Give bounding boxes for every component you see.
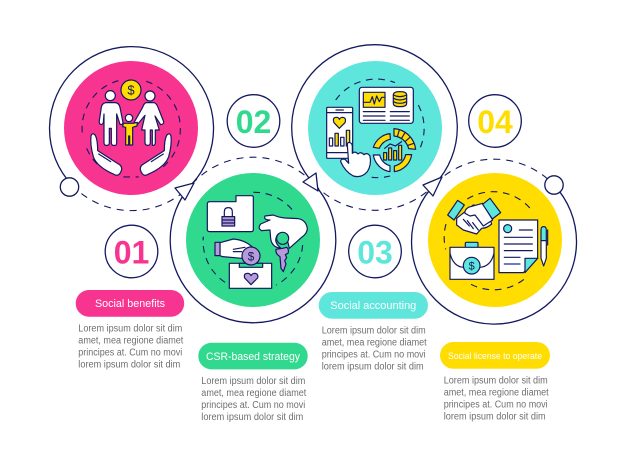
label pill: social accounting: Social accounting	[330, 300, 416, 312]
number 01 badge	[105, 225, 158, 278]
text: social accounting description	[322, 326, 427, 372]
icon: folder, key and donation: $	[248, 250, 255, 263]
label pill: CSR-based strategy: CSR-based strategy	[206, 351, 300, 363]
label pill: social benefits: Social benefits	[95, 298, 165, 310]
text: CSR-based strategy description: principes at. Cum no movi	[201, 400, 305, 411]
label pill: CSR-based strategy	[198, 343, 308, 369]
text: social benefits description	[78, 324, 184, 371]
number 02 badge: 02	[236, 104, 271, 140]
text: social benefits description: amet, mea regione diamet	[78, 336, 184, 347]
panel: CSR-based strategy icon circle	[186, 173, 320, 307]
text: social license description: principes at. Cum no movi	[444, 400, 548, 410]
text: social benefits description: lorem ipsum dolor sit dim	[78, 360, 180, 371]
panel: social accounting icon circle	[308, 61, 442, 195]
text: social benefits description: Lorem ipsum dolor sit dim	[78, 324, 182, 335]
text: CSR-based strategy description: Lorem ipsum dolor sit dim	[201, 376, 305, 387]
label pill: social license to operate	[440, 342, 550, 369]
label pill: social benefits	[76, 290, 184, 317]
icon: phone, report and charts	[327, 79, 424, 178]
text: social accounting description: lorem ipsum dolor sit dim	[322, 362, 424, 372]
number 01 badge: 01	[114, 234, 149, 270]
number 04 badge: 04	[477, 104, 513, 140]
text: CSR-based strategy description: lorem ipsum dolor sit dim	[201, 412, 303, 423]
text: CSR-based strategy description: amet, mea regione diamet	[201, 388, 307, 399]
number 03 badge: 03	[357, 234, 393, 270]
text: CSR-based strategy description	[201, 376, 307, 423]
panel: social license icon circle	[428, 173, 562, 307]
number 02 badge	[227, 95, 280, 147]
number 03 badge	[349, 225, 401, 278]
number 04 badge	[469, 95, 521, 147]
text: social benefits description: principes at. Cum no movi	[78, 348, 182, 359]
icon: handshake, briefcase and contract: $	[469, 261, 475, 273]
text: social license description	[444, 376, 549, 422]
text: social license description: Lorem ipsum dolor sit dim	[444, 376, 548, 386]
text: social license description: lorem ipsum dolor sit dim	[444, 412, 546, 422]
text: social license description: amet, mea regione diamet	[444, 388, 549, 398]
label pill: social license to operate: Social license to operate	[448, 351, 542, 362]
icon: family in hands: $	[127, 83, 135, 98]
panel: social benefits icon circle	[64, 61, 198, 195]
connector path: circles and arrows	[50, 45, 577, 324]
text: social accounting description: Lorem ipsum dolor sit dim	[322, 326, 426, 336]
text: social accounting description: principes at. Cum no movi	[322, 350, 426, 360]
text: social accounting description: amet, mea regione diamet	[322, 338, 427, 348]
label pill: social accounting	[319, 292, 428, 319]
